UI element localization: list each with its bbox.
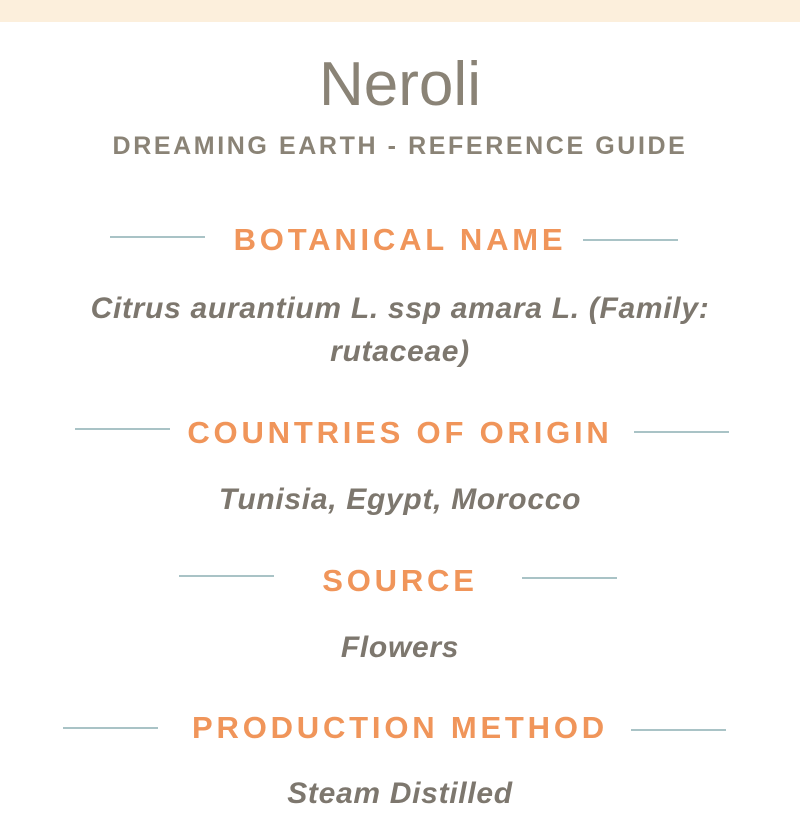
text: production method: Steam Distilled (287, 777, 513, 810)
top band (0, 0, 800, 22)
text: countries: Tunisia, Egypt, Morocco (219, 483, 581, 516)
text: source: Flowers (341, 631, 459, 664)
text: botanical name: rutaceae) (330, 335, 470, 368)
subtitle: DREAMING EARTH - REFERENCE GUIDE (113, 132, 687, 160)
heading: botanical name: BOTANICAL NAME (234, 222, 566, 257)
heading: countries of origin: COUNTRIES OF ORIGIN (187, 415, 613, 450)
text: botanical name: Citrus aurantium L. ssp amara L. (Family: (91, 292, 709, 325)
title: Neroli (319, 50, 481, 119)
heading: source: SOURCE (322, 563, 478, 598)
text: botanical name (91, 292, 709, 368)
heading: production method: PRODUCTION METHOD (192, 710, 608, 745)
